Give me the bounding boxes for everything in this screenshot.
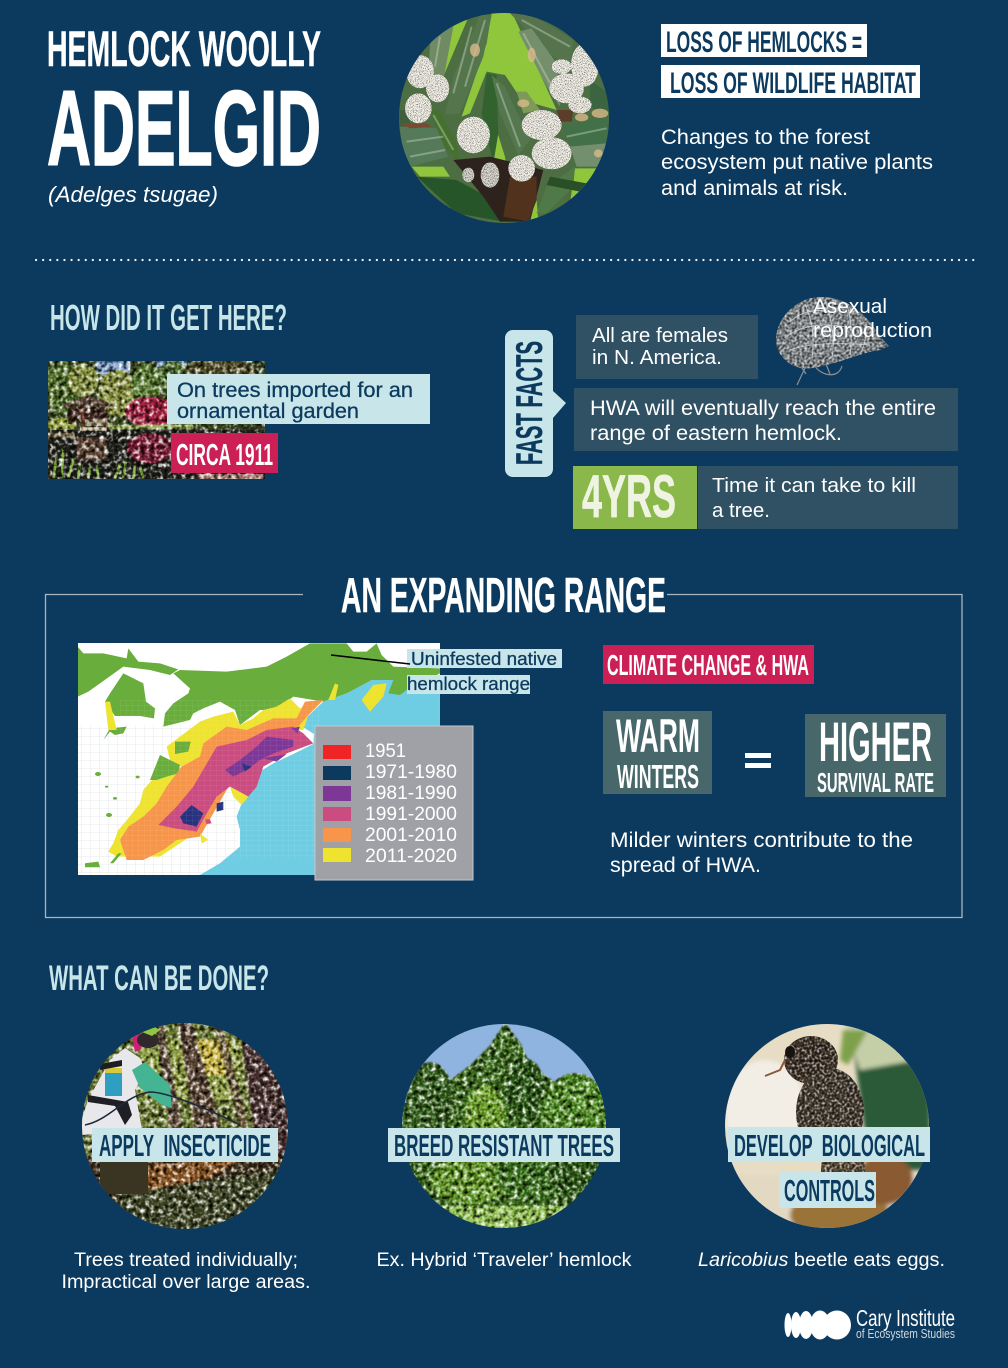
label: develop biological controls: CONTROLS: [784, 1173, 875, 1208]
tag: fast facts: [505, 330, 566, 477]
logo: cary institute: of Ecosystem Studies: [856, 1326, 955, 1341]
box: higher survival rate: [805, 710, 946, 798]
panel: expanding range: [46, 569, 962, 918]
equals sign: [745, 753, 771, 768]
label: apply insecticide: [92, 1128, 278, 1163]
legend: 2001-2010: [365, 824, 457, 846]
title: [47, 21, 321, 207]
label: apply insecticide: APPLY INSECTICIDE: [99, 1128, 271, 1163]
photo: ornamental garden: [45, 360, 270, 480]
box: warm winters: [603, 709, 712, 795]
photo: applying insecticide: [82, 1023, 288, 1230]
icon: adelgid micrograph: [776, 297, 889, 385]
text: trees treated: [62, 1250, 310, 1293]
text: milder winters: Milder winters contribute to the: [610, 829, 913, 852]
text: asexual reproduction: [813, 295, 932, 342]
text: milder winters: spread of HWA.: [610, 854, 761, 877]
fact: entire range: HWA will eventually reach the entire: [590, 397, 936, 420]
callout: uninfested native hemlock range: hemlock range: [407, 673, 530, 694]
fact: all females: All are females: [592, 324, 728, 347]
heading: an expanding range: AN EXPANDING RANGE: [341, 569, 666, 623]
heading: what can be done: WHAT CAN BE DONE?: [49, 959, 269, 998]
text: forest ecosystem: and animals at risk.: [661, 177, 848, 200]
label: climate change and hwa: CLIMATE CHANGE & HWA: [607, 650, 809, 682]
text: forest ecosystem: Changes to the forest: [661, 126, 870, 149]
fact: all females: [576, 315, 758, 379]
fact: entire range: [574, 388, 958, 451]
text: laricobius: Laricobius beetle eats eggs.: [698, 1250, 945, 1271]
photo: hybrid hemlock tree: [400, 1022, 609, 1230]
legend: 1991-2000: [365, 803, 457, 825]
text: trees treated: Impractical over large areas.: [62, 1272, 310, 1293]
text: trees treated: Trees treated individually;: [74, 1250, 298, 1271]
label: circa 1911: CIRCA 1911: [176, 437, 273, 472]
callout: imported on trees: ornamental garden: [177, 400, 359, 423]
text: forest ecosystem: ecosystem put native plants: [661, 151, 933, 174]
callout: uninfested native hemlock range: [331, 648, 562, 694]
text: asexual reproduction: reproduction: [813, 319, 932, 342]
label: breed resistant trees: [388, 1128, 620, 1163]
text: forest ecosystem: [661, 126, 933, 200]
photo: adelgid on hemlock twig: [398, 12, 609, 223]
label: climate change and hwa: [603, 645, 814, 684]
logo: cary institute: [784, 1305, 955, 1341]
text: traveler hemlock: Ex. Hybrid ‘Traveler’ hemlock: [376, 1250, 632, 1271]
callout: loss of hemlocks: LOSS OF HEMLOCKS =: [666, 26, 862, 59]
tag: fast facts: FAST FACTS: [509, 341, 550, 465]
legend: [315, 726, 473, 880]
text: milder winters: [610, 829, 913, 877]
label: develop biological controls: [728, 1127, 930, 1208]
box: warm winters: WINTERS: [617, 758, 699, 795]
callout: loss of hemlocks: [661, 24, 920, 100]
photo: laricobius beetle: [725, 1023, 930, 1240]
heading: how did it get here: HOW DID IT GET HERE?: [50, 297, 287, 338]
callout: imported on trees: [167, 374, 430, 424]
text: asexual reproduction: Asexual: [813, 295, 887, 318]
label: breed resistant trees: BREED RESISTANT TREES: [394, 1128, 614, 1163]
logo: cary institute: Cary Institute: [856, 1305, 955, 1331]
legend: 1951: [365, 740, 406, 762]
map: hwa spread: [78, 643, 440, 875]
title: (Adelges tsugae): [48, 182, 218, 207]
fact: four years: [573, 463, 958, 530]
box: warm winters: WARM: [616, 709, 700, 762]
legend: 2011-2020: [365, 845, 457, 867]
title: ADELGID: [47, 68, 321, 188]
legend: 1971-1980: [365, 761, 457, 783]
callout: imported on trees: On trees imported for an: [177, 379, 413, 402]
legend: 1981-1990: [365, 782, 457, 804]
fact: entire range: range of eastern hemlock.: [590, 422, 842, 445]
callout: uninfested native hemlock range: Uninfested native: [411, 648, 557, 669]
fact: four years: Time it can take to kill: [712, 474, 916, 497]
fact: all females: in N. America.: [592, 346, 722, 369]
fact: four years: a tree.: [712, 499, 770, 522]
title: HEMLOCK WOOLLY: [47, 21, 321, 77]
label: circa 1911: [171, 433, 278, 473]
fact: four years: 4YRS: [582, 463, 676, 530]
